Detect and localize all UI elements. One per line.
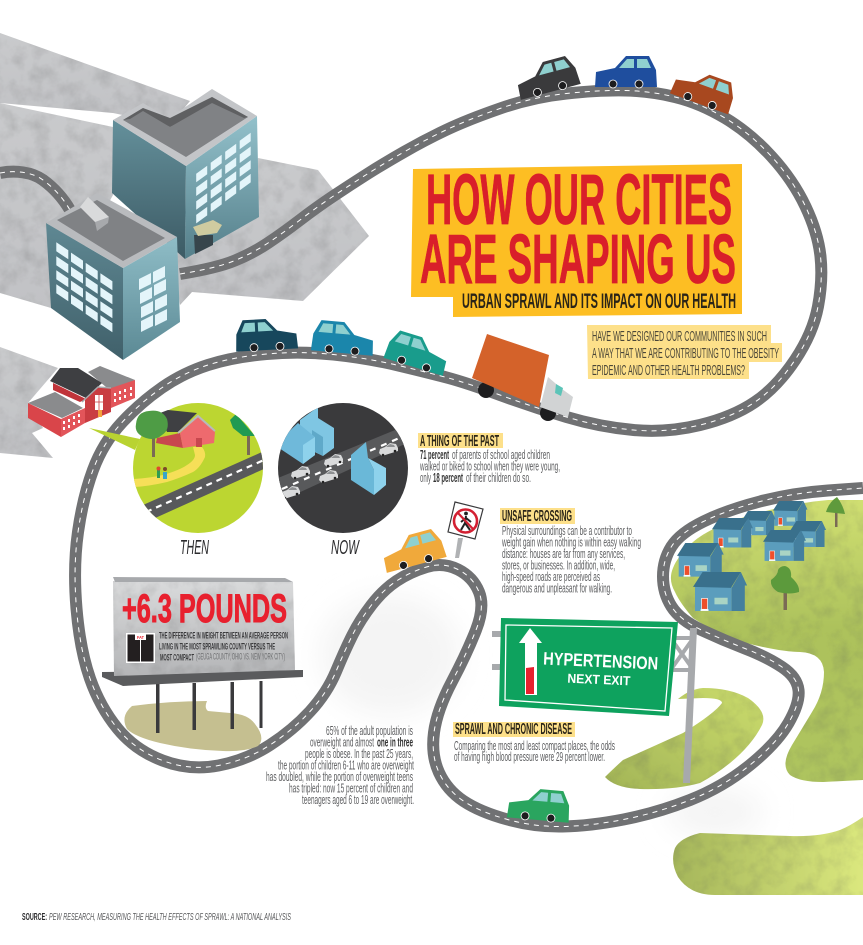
billboard: LIVING IN THE MOST SPRAWLING COUNTY VERSUS THE	[159, 642, 275, 652]
panel: THEN circle	[133, 403, 266, 533]
source line: SOURCE:	[22, 911, 47, 923]
text block: adult population: overweight and almost	[310, 736, 374, 750]
text block: a thing of the past: 71 percent	[420, 448, 449, 462]
text block: adult population: 65% of the adult population is	[326, 724, 413, 738]
text block: unsafe crossing: high-speed roads are perceived as	[502, 570, 600, 584]
grey city shadow	[0, 33, 369, 308]
text block: unsafe crossing	[500, 508, 641, 596]
text block: adult population: teenagers aged 6 to 19 are overweight.	[302, 793, 414, 807]
billboard: MOST COMPACT	[160, 652, 194, 664]
billboard: (GEUGA COUNTY, OHIO VS. NEW YORK CITY)	[196, 652, 285, 662]
trees on hill	[771, 497, 845, 610]
text block: a thing of the past: of parents of school aged children	[452, 448, 550, 462]
tall office building	[112, 89, 259, 259]
small office building	[46, 193, 180, 360]
label: NOW: NOW	[331, 537, 360, 559]
intro question	[587, 325, 782, 379]
text block: a thing of the past: 18 percent	[433, 471, 463, 485]
text block: a thing of the past	[418, 433, 560, 485]
orange delivery truck	[472, 334, 573, 421]
no pedestrians sign	[448, 502, 483, 558]
text block: unsafe crossing: distance: houses are far from any services,	[502, 547, 625, 561]
pale smudges behind road	[320, 595, 763, 836]
source line: PEW RESEARCH, MEASURING THE HEALTH EFFECTS OF SPRAWL: A NATIONAL ANALYSIS	[49, 911, 291, 923]
text block: sprawl and chronic disease: of having high blood pressure were 29 percent lower.	[454, 750, 605, 764]
text block: a thing of the past: A THING OF THE PAST	[420, 433, 499, 450]
cars on top road	[513, 54, 739, 115]
text block: unsafe crossing: stores, or businesses. In addition, wide,	[502, 558, 615, 572]
road: short section entering behind buildings	[0, 172, 70, 210]
green car	[507, 786, 571, 824]
text block: a thing of the past: of their children do so.	[466, 471, 531, 485]
text block: unsafe crossing: Physical surroundings can be a contributor to	[502, 524, 632, 538]
text block: adult population: has doubled, while the portion of overweight teens	[266, 770, 413, 784]
hill: bottom right	[673, 817, 863, 895]
red school building	[28, 366, 135, 437]
text block: a thing of the past: only	[420, 471, 431, 485]
callout pointer from school to THEN circle	[89, 428, 140, 450]
panel: NOW circle	[278, 403, 408, 533]
text block: adult population	[266, 724, 414, 807]
cars on middle road	[235, 317, 452, 377]
suburban houses	[677, 501, 826, 611]
billboard	[102, 577, 303, 751]
billboard: FAT	[137, 635, 144, 640]
source line	[22, 911, 291, 923]
hill: inner curl	[605, 688, 763, 789]
yellow car	[379, 527, 447, 574]
text block: unsafe crossing: weight gain when nothing is within easy walking	[501, 536, 641, 550]
text block: adult population: people is obese. In the past 25 years,	[305, 747, 413, 761]
hill: upper right	[671, 500, 863, 782]
grey school shadow	[0, 347, 58, 458]
text block: sprawl and chronic disease: SPRAWL AND CHRONIC DISEASE	[455, 721, 572, 738]
text block: unsafe crossing: UNSAFE CROSSING	[502, 508, 572, 525]
text block: adult population: one in three	[377, 736, 413, 750]
hypertension highway sign	[492, 618, 697, 783]
hypertension highway sign: HYPERTENSION	[543, 649, 659, 674]
title banner	[411, 161, 742, 317]
text block: sprawl and chronic disease	[453, 721, 615, 764]
text block: unsafe crossing: dangerous and unpleasant for walking.	[502, 582, 612, 596]
billboard: +6.3 POUNDS	[122, 587, 287, 631]
text block: adult population: the portion of children 6-11 who are overweight	[278, 758, 414, 772]
text block: a thing of the past: walked or biked to school when they were young,	[419, 460, 560, 474]
text: THE DIFFERENCE IN WEIGHT BETWEEN AN AVERAGE PERSON	[159, 630, 288, 642]
road: main winding route	[75, 90, 863, 827]
hypertension highway sign: NEXT EXIT	[567, 671, 631, 688]
text block: sprawl and chronic disease: Comparing the most and least compact places, the odds	[454, 739, 615, 753]
label: THEN: THEN	[180, 537, 209, 559]
text block: adult population: has tripled: now 15 percent of children and	[289, 782, 413, 796]
